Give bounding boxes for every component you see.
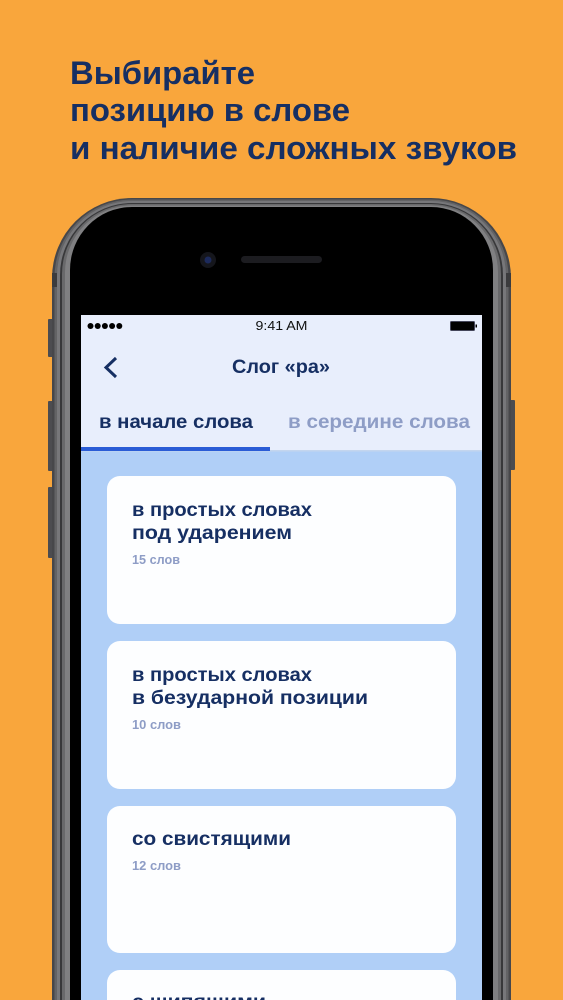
card 4: [107, 970, 456, 1000]
title: [70, 55, 517, 166]
card 1: [107, 476, 456, 624]
status bar: [88, 319, 477, 333]
card 1: 15 слов: [132, 552, 180, 567]
tab underline: [81, 450, 482, 452]
card 1: в простых словах: [132, 500, 312, 521]
card 3: 12 слов: [132, 858, 181, 873]
card 3: [107, 806, 456, 953]
active tab: в начале слова: [99, 411, 253, 433]
card 2: 10 слов: [132, 717, 181, 732]
inactive tab: в середине слова: [288, 411, 470, 433]
title: Выбирайте: [70, 55, 255, 91]
black bezel: [70, 207, 493, 1000]
card 1: под ударением: [132, 523, 292, 544]
app header: [81, 315, 482, 452]
phone body: [52, 198, 511, 1000]
active tab indicator: [81, 447, 270, 451]
card 2: в безударной позиции: [132, 688, 368, 709]
title: и наличие сложных звуков: [70, 130, 517, 166]
antenna bands: [52, 273, 511, 287]
card 2: в простых словах: [132, 665, 312, 686]
signal dots: [88, 323, 122, 329]
speaker: [241, 256, 322, 263]
side buttons: [48, 319, 515, 558]
screen title: Слог «ра»: [232, 357, 330, 378]
camera: [200, 252, 216, 268]
battery: [450, 322, 477, 330]
phone: [48, 198, 515, 1000]
screen: [81, 315, 482, 1000]
card 2: [107, 641, 456, 789]
back arrow: [106, 358, 116, 377]
title: позицию в слове: [70, 92, 350, 128]
card 3: со свистящими: [132, 829, 291, 850]
time: 9:41 AM: [256, 319, 308, 333]
